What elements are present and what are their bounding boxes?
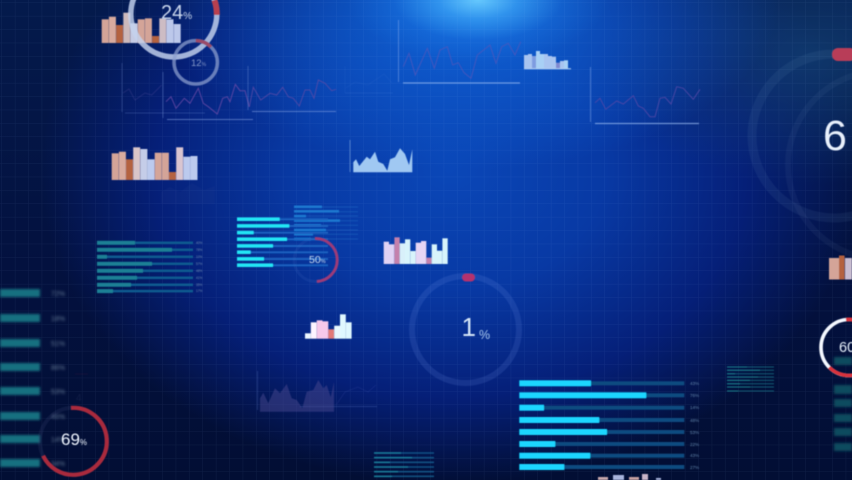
ring: 1 percent: 1 <box>462 312 476 342</box>
bar list: blurred teal, left edge: 86% <box>51 365 65 372</box>
bar list: large cyan, lower right: 27% <box>690 465 699 470</box>
panel: faint ghost charts <box>75 66 393 404</box>
bar list: dim teal, left: 10% <box>196 255 203 259</box>
bar list: large cyan, lower right: 43% <box>690 453 699 458</box>
panel: faint ghost charts: 4 <box>76 393 82 404</box>
ring: 50 percent: 50% <box>309 254 326 266</box>
histogram: small top centre <box>524 51 571 69</box>
bar list: faint blue overlay <box>294 206 358 240</box>
bar list: large cyan, lower right: 48% <box>690 418 699 423</box>
bar list: dim teal, left: 35% <box>196 283 203 287</box>
line chart: top centre <box>398 20 521 83</box>
ring: 69 percent: 69% <box>61 430 87 449</box>
ring: 24 percent: 24% <box>161 2 192 24</box>
bar list: lower centre teal <box>374 453 434 476</box>
bar list: blurred teal, left edge: 51% <box>51 341 65 348</box>
bar list: bright cyan, centre left <box>237 217 328 267</box>
ring: 1 percent <box>412 274 519 383</box>
bar list: blurred teal, right edge <box>834 357 852 451</box>
bar chart: cropped bottom edge <box>598 474 661 480</box>
ring: 12 percent <box>174 41 217 84</box>
line chart: left overlap <box>163 72 253 120</box>
bar list: dim teal, left: 41% <box>196 276 203 280</box>
bar list: large cyan, lower right: 76% <box>690 393 699 398</box>
panel: large ring, right edge: 6 <box>823 112 847 160</box>
line chart: centre left <box>248 66 336 112</box>
area chart: centre <box>350 140 412 172</box>
bar list: blurred teal, left edge: 34% <box>51 461 65 468</box>
bar chart: cropped right edge <box>829 256 852 280</box>
line chart: top right <box>590 67 700 124</box>
bar list: blurred teal, left edge: 72% <box>51 291 65 298</box>
bar list: large cyan, lower right: 43% <box>690 381 699 386</box>
bar list: dim teal, left: 40% <box>196 241 203 245</box>
ring: 50 percent <box>293 238 338 282</box>
bar list: blurred teal, left edge <box>0 289 65 468</box>
ring: 1 percent: % <box>479 328 490 342</box>
ring: 60 percent <box>821 319 852 376</box>
line chart: far left faint <box>122 63 205 113</box>
bar list: dim teal, left: 17% <box>196 289 203 293</box>
bar list: blurred teal, left edge: 53% <box>51 389 65 396</box>
bar list: blurred teal, left edge: 18% <box>51 316 65 323</box>
bar list: large cyan, lower right: 53% <box>690 430 699 435</box>
bar chart: small centre <box>305 314 352 339</box>
bar list: large cyan, lower right: 22% <box>690 442 699 447</box>
bar list: large cyan, lower right <box>519 380 699 470</box>
bar list: large cyan, lower right: 14% <box>690 405 699 410</box>
bar list: blurred teal, left edge: 14% <box>51 437 65 444</box>
bar chart: left middle <box>112 147 198 180</box>
bar list: tiny teal, lower right <box>727 367 774 391</box>
ring: 24 percent <box>131 0 217 57</box>
ring: 12 percent: 12% <box>191 58 207 69</box>
bar list: dim teal, left: 78% <box>196 248 203 252</box>
bar list: dim teal, left: 48% <box>196 269 203 273</box>
bar chart: centre right <box>384 237 448 264</box>
area chart: faint lower centre <box>258 371 377 412</box>
bar list: dim teal, left: 57% <box>196 262 203 266</box>
bar chart: top left <box>102 13 181 43</box>
bar list: dim teal, left <box>97 241 203 293</box>
panel: large ring, right edge <box>752 48 852 259</box>
bar list: blurred teal, left edge: 46% <box>51 414 65 421</box>
ring: 69 percent <box>38 406 109 477</box>
